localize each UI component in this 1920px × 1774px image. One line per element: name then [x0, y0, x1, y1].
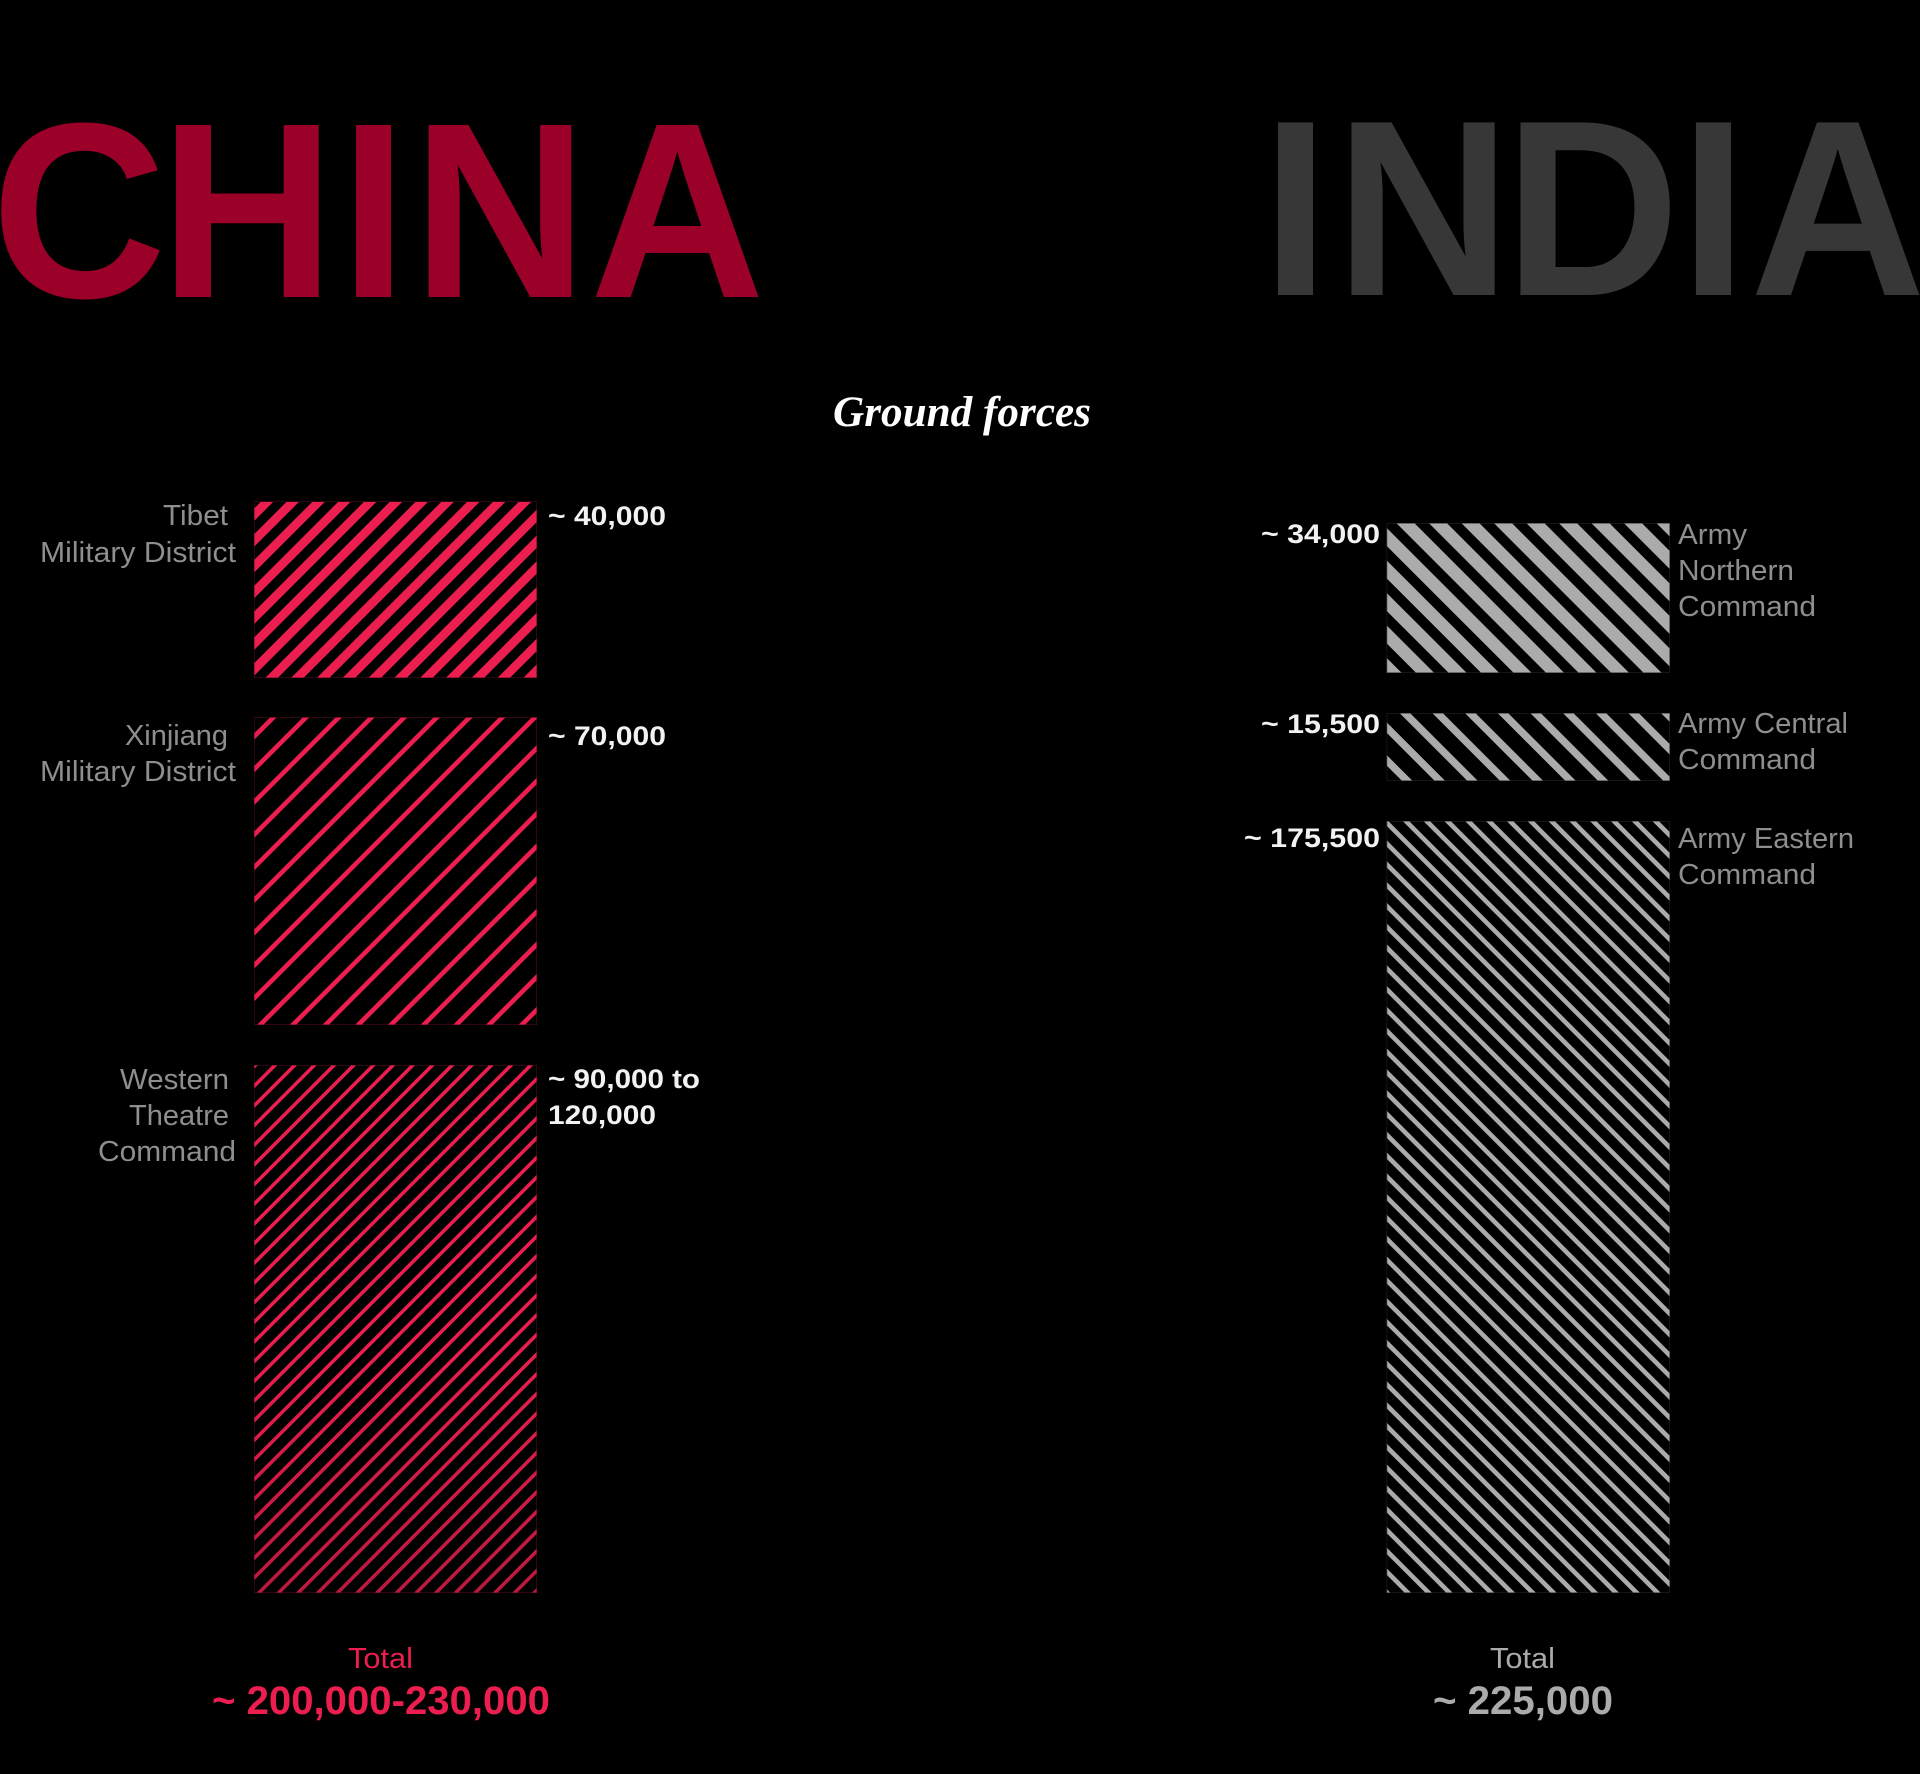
total: India: ~ 225,000 — [1433, 1679, 1613, 1723]
value: Central: ~ 15,500 — [1261, 709, 1380, 739]
total: China: Total — [348, 1643, 413, 1675]
total: India: Total — [1490, 1643, 1555, 1675]
label: Xinjiang Military District — [40, 720, 236, 788]
bar: Xinjiang Military District — [254, 717, 537, 1025]
label: Army Central Command — [1678, 708, 1848, 776]
bar: Army Eastern Command — [1386, 821, 1670, 1593]
label: Western Theatre Command: Western — [120, 1064, 229, 1096]
value: Xinjiang: ~ 70,000 — [548, 721, 666, 751]
label: Tibet Military District — [40, 500, 236, 569]
bar: Tibet Military District — [254, 502, 537, 678]
total: China — [212, 1643, 550, 1723]
label: Tibet Military District: Tibet — [163, 500, 228, 532]
label: Tibet Military District: Military District — [40, 537, 236, 569]
label: Army Northern Command: Command — [1678, 591, 1816, 623]
value: Northern: ~ 34,000 — [1261, 519, 1380, 549]
label: Xinjiang Military District: Xinjiang — [125, 720, 228, 752]
panel: India ground forces — [1244, 483, 1854, 1723]
value: Eastern: ~ 175,500 — [1244, 823, 1380, 853]
label: Army Eastern Command: Army Eastern — [1678, 823, 1854, 855]
label: Army Northern Command — [1678, 519, 1816, 623]
value: Western Theatre — [548, 1064, 700, 1130]
value: Western Theatre: ~ 90,000 to — [548, 1064, 700, 1094]
total: China: ~ 200,000-230,000 — [212, 1679, 550, 1723]
label: Xinjiang Military District: Military District — [40, 756, 236, 788]
label: Western Theatre Command: Theatre — [129, 1100, 229, 1132]
bar: Army Central Command — [1386, 713, 1670, 781]
value: Western Theatre: 120,000 — [548, 1100, 656, 1130]
label: Western Theatre Command — [98, 1064, 236, 1168]
label: Western Theatre Command: Command — [98, 1136, 236, 1168]
label: Army Central Command: Army Central — [1678, 708, 1848, 740]
total: India — [1433, 1643, 1613, 1723]
label: Army Eastern Command: Command — [1678, 859, 1816, 891]
label: Army Northern Command: Army — [1678, 519, 1747, 551]
panel: China ground forces — [40, 452, 700, 1723]
bar: Army Northern Command — [1386, 523, 1670, 673]
label: Army Northern Command: Northern — [1678, 555, 1794, 587]
bar: Western Theatre Command — [254, 1065, 537, 1593]
label: Army Central Command: Command — [1678, 744, 1816, 776]
label: Army Eastern Command — [1678, 823, 1854, 891]
heading: Ground forces: Ground forces — [833, 389, 1091, 436]
value: Tibet: ~ 40,000 — [548, 501, 666, 531]
title: CHINA: CHINA — [0, 72, 765, 351]
title: INDIA: INDIA — [1262, 69, 1920, 349]
